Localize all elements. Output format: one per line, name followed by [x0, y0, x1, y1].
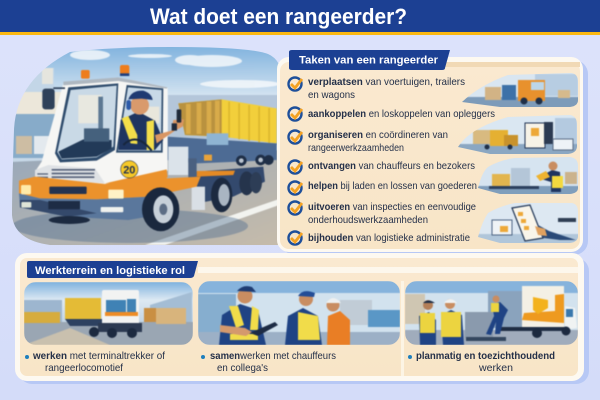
task list text: verplaatsen van voertuigen, trailers	[308, 76, 465, 88]
tractor	[19, 65, 265, 231]
driver	[118, 112, 163, 150]
windshield	[55, 83, 118, 162]
thumbnail: worker loading goods	[478, 157, 578, 194]
caption: planmatig en toezichthoudend: werken	[478, 362, 513, 374]
tractor: 20	[123, 164, 135, 176]
mirror	[42, 89, 55, 109]
front wheel	[142, 187, 179, 231]
title banner	[0, 0, 600, 35]
checklist icons	[288, 78, 302, 244]
caption: samenwerken met chauffeurs: en collega's	[217, 362, 268, 374]
section heading: Werkterrein en logistieke rol	[35, 265, 185, 277]
tasks heading: Taken van een rangeerder	[299, 54, 439, 66]
lower navy body	[19, 193, 150, 220]
image: two people talking with tablet	[198, 281, 400, 345]
distant warehouse	[10, 68, 283, 158]
task list text: aankoppelen en loskoppelen van opleggers	[308, 108, 495, 120]
task list text: uitvoeren van inspecties en eenvoudige	[308, 201, 476, 213]
side window	[116, 85, 163, 153]
task list text: ontvangen van chauffeurs en bezokers	[308, 160, 475, 172]
image: delivery van being loaded	[405, 281, 578, 345]
caption: werken met terminaltrekker	[25, 350, 165, 374]
caption: planmatig en toezichthoudend: planmatig en toezichthoudend	[416, 350, 555, 362]
task list text: en wagons	[308, 89, 355, 101]
panel: taken van een rangeerder	[277, 50, 588, 255]
caption: samenwerken met chauffeurs	[201, 350, 336, 374]
rear chassis	[197, 167, 265, 203]
task list text: onderhoudswerkzaamheden	[308, 214, 428, 226]
thumbnail: documents and yellow vehicle	[456, 114, 578, 155]
roof trim	[63, 77, 168, 89]
clouds	[70, 50, 280, 88]
task list text: bijhouden van logistieke administratie	[308, 232, 470, 244]
section heading	[27, 261, 198, 278]
orange bumper band	[19, 173, 201, 199]
caption: werken met terminaltrekker: rangeerlocomotief	[45, 362, 123, 374]
task list text: helpen bij laden en lossen van goederen	[308, 180, 477, 192]
caption: samenwerken met chauffeurs: samenwerken met chauffeurs	[210, 350, 336, 362]
tasks heading	[289, 50, 450, 70]
task list text: rangeerwerkzaamheden	[308, 142, 404, 154]
thumbnail: clipboard and laptop	[478, 203, 578, 243]
title banner: Wat doet een rangeerder?	[150, 4, 407, 29]
task list text	[308, 76, 495, 244]
badge 20	[121, 161, 138, 178]
thumbnail: truck with cargo	[460, 72, 580, 108]
amber beacons	[81, 70, 90, 79]
cab body	[35, 77, 168, 184]
caption: werken met terminaltrekker: werken met terminaltrekker of	[32, 350, 165, 362]
task list text: organiseren en coördineren van	[308, 129, 448, 141]
panel: werkterrein en logistieke rol	[15, 253, 589, 384]
yellow container trailer	[167, 99, 277, 166]
ground	[10, 150, 285, 250]
hero illustration: terminal tractor with driver	[10, 45, 285, 250]
caption: planmatig en toezichthoudend	[408, 350, 555, 374]
image: terminal trucks on yard	[24, 282, 193, 345]
